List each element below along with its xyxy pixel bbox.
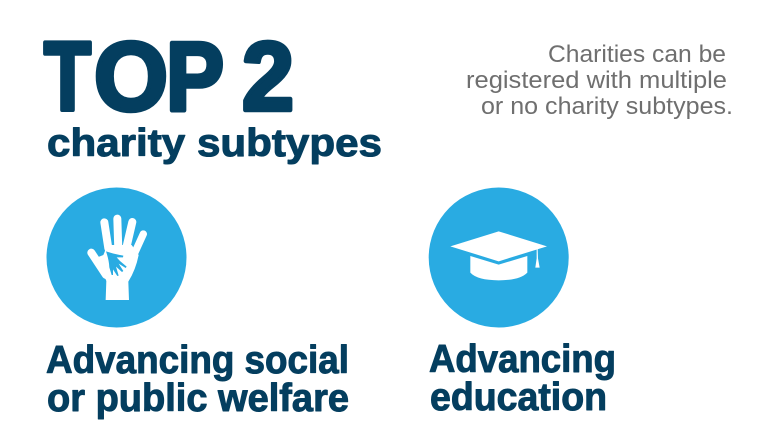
title: TOP 2 [44, 22, 294, 131]
label: Advancing social or public welfare: Advancing social [46, 339, 349, 382]
label: Advancing education: Advancing [429, 338, 616, 381]
icon: hands in blue circle [46, 188, 186, 328]
label: Advancing education: education [430, 376, 607, 419]
subtitle: charity subtypes: charity subtypes [47, 122, 382, 165]
note: subtypes explanation: registered with multiple [466, 67, 727, 94]
title: TOP 2: O [94, 22, 168, 131]
label: Advancing social or public welfare: or public welfare [47, 377, 349, 420]
label: Advancing education [429, 338, 616, 419]
note: subtypes explanation: or no charity subtypes. [481, 93, 733, 120]
label: Advancing social or public welfare [46, 339, 349, 420]
title: TOP 2: 2 [242, 22, 294, 131]
note: subtypes explanation [466, 41, 733, 120]
title: TOP 2: T [44, 22, 91, 131]
note: subtypes explanation: Charities can be [548, 41, 726, 68]
title: TOP 2: P [166, 22, 224, 131]
icon: graduation cap in blue circle [429, 188, 569, 328]
